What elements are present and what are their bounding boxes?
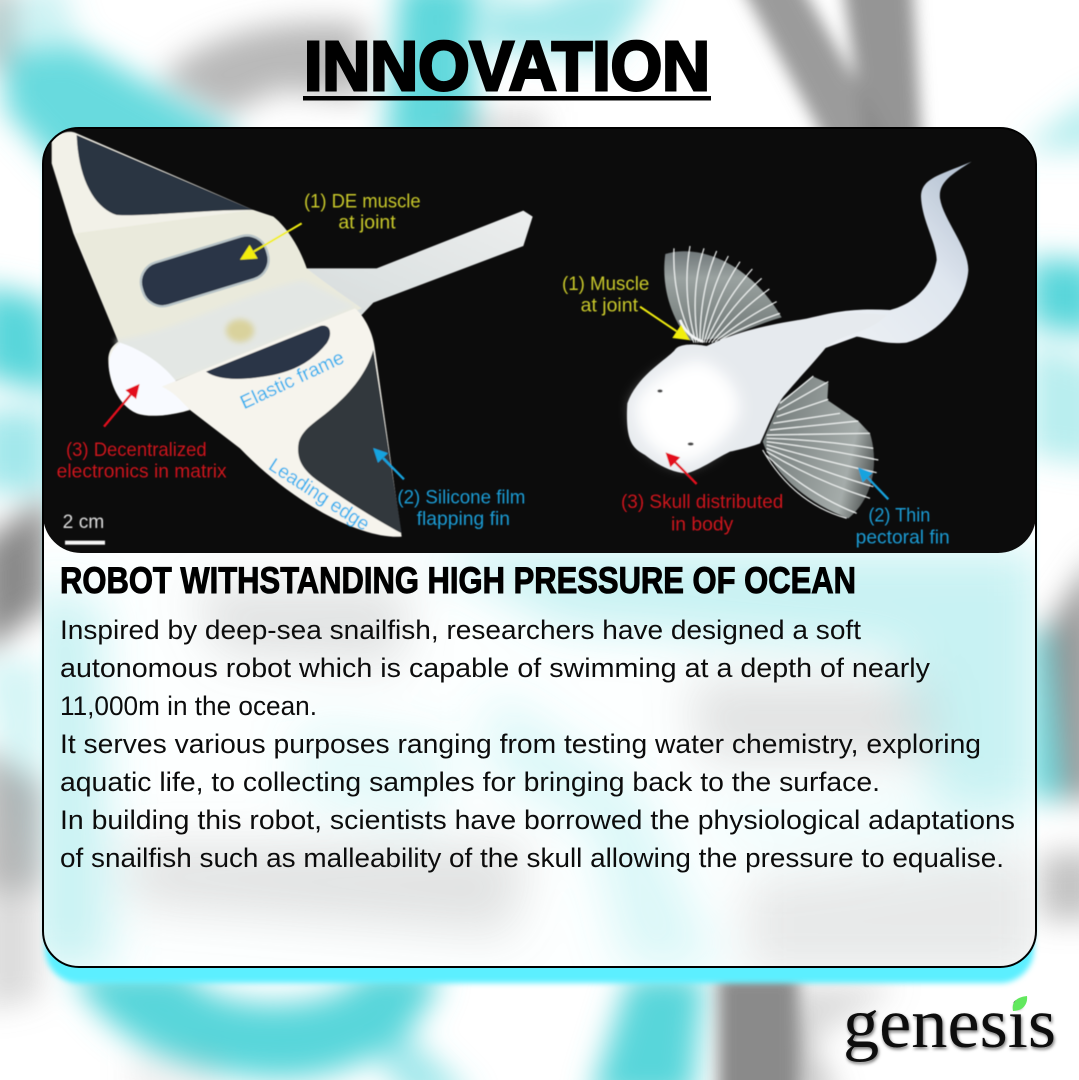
body text: autonomous robot which is capable of swimming at a depth of nearly — [60, 653, 931, 683]
electronics — [226, 319, 254, 342]
lower wing — [162, 308, 402, 537]
labels left: (3) Decentralized — [66, 440, 207, 461]
labels left: electronics in matrix — [57, 461, 227, 482]
arrows left — [104, 223, 404, 479]
labels right: (3) Skull distributed — [621, 492, 783, 513]
body text: aquatic life, to collecting samples for bringing back to the surface. — [60, 767, 880, 797]
scale bar — [65, 541, 105, 545]
lower window — [206, 326, 330, 379]
lower fin film — [298, 350, 402, 533]
labels left: Leading edge — [265, 455, 373, 536]
text card — [30, 128, 1040, 975]
labels right: pectoral fin — [856, 527, 950, 548]
eyes — [657, 389, 663, 393]
body text — [60, 615, 1015, 873]
photo panel — [43, 128, 1036, 553]
body text: It serves various purposes ranging from testing water chemistry, exploring — [60, 729, 981, 759]
photo: flapping soft robot — [52, 132, 533, 545]
labels left — [57, 191, 525, 536]
body text: Inspired by deep-sea snailfish, researchers have designed a soft — [60, 615, 862, 645]
logo: genesis: genesis — [843, 985, 1056, 1063]
labels right — [562, 274, 950, 548]
robot body — [52, 132, 362, 416]
fish body — [626, 315, 826, 474]
arrows right — [640, 307, 888, 499]
head dome — [109, 343, 189, 415]
tail stem — [297, 211, 533, 315]
card outline — [43, 128, 1036, 967]
lower pectoral fin — [763, 376, 878, 518]
body text: of snailfish such as malleability of the skull allowing the pressure to equalise. — [60, 843, 1004, 873]
photo: biomimetic snailfish — [562, 162, 972, 548]
tail — [800, 162, 972, 350]
labels left: flapping fin — [417, 509, 510, 530]
labels left: Elastic frame — [237, 347, 348, 414]
subheading: ROBOT WITHSTANDING HIGH PRESSURE OF OCEAN — [60, 560, 856, 601]
body text: In building this robot, scientists have borrowed the physiological adaptations — [60, 805, 1015, 835]
labels right: (1) Muscle — [562, 274, 649, 295]
upper window — [139, 234, 270, 308]
top fin film — [77, 135, 253, 215]
icon: leaf — [1013, 996, 1027, 1011]
upper pectoral fin — [664, 246, 782, 343]
translucent joint — [112, 313, 260, 382]
card glow — [45, 140, 1034, 983]
cream wing band — [76, 210, 360, 339]
body text: 11,000m in the ocean. — [60, 691, 317, 721]
labels left: (1) DE muscle — [304, 191, 421, 212]
labels left: (2) Silicone film — [397, 487, 525, 508]
labels right: in body — [671, 515, 734, 536]
labels left: at joint — [338, 212, 396, 233]
title: INNOVATION — [304, 27, 710, 105]
labels left: 2 cm — [63, 512, 104, 533]
labels right: at joint — [581, 295, 639, 316]
labels right: (2) Thin — [868, 506, 930, 527]
head highlight — [635, 360, 740, 463]
